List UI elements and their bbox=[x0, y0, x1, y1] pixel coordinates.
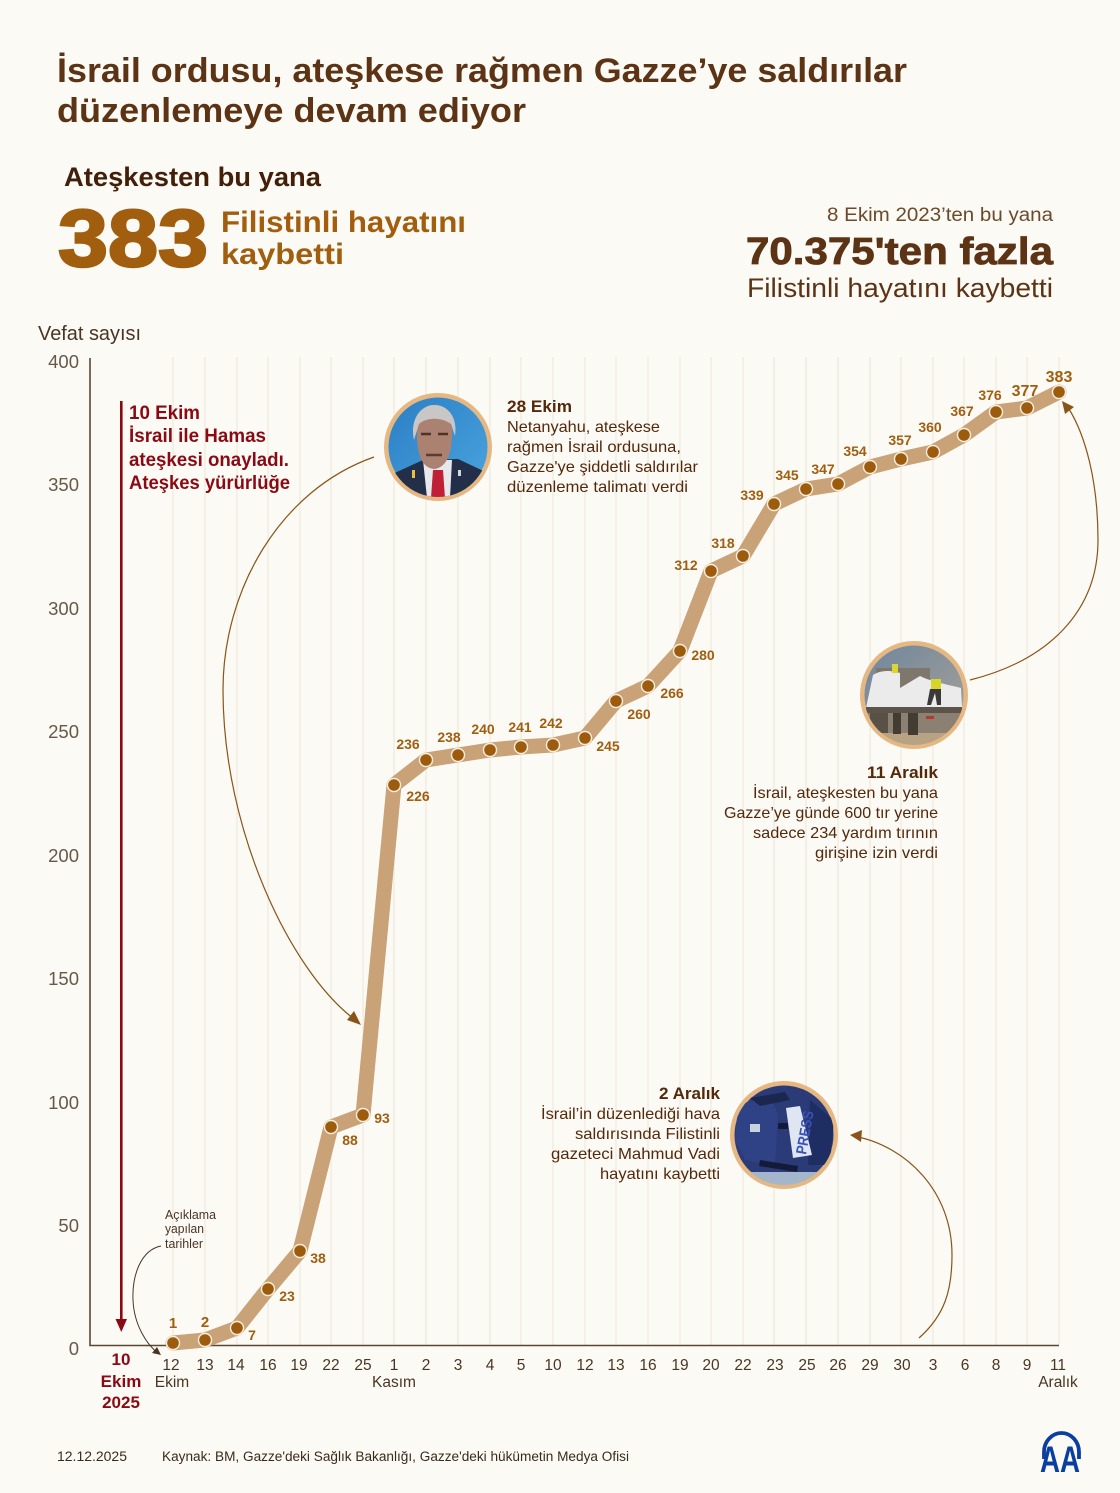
x axis date labels: 16 bbox=[639, 1357, 657, 1374]
data value labels: 242 bbox=[539, 715, 563, 731]
callout: 2 Aralık: saldırısında Filistinli bbox=[575, 1126, 720, 1143]
photo: Netanyahu bbox=[384, 393, 492, 501]
data value labels: 312 bbox=[674, 557, 698, 573]
data value labels: 7 bbox=[248, 1327, 256, 1343]
x axis ceasefire date bbox=[101, 1350, 141, 1412]
y axis labels: 100 bbox=[48, 1092, 79, 1113]
y axis labels: 150 bbox=[48, 968, 79, 989]
x axis date labels: Aralık bbox=[1038, 1374, 1078, 1391]
stat: deaths since October 2023 bbox=[746, 205, 1054, 303]
data value labels: 245 bbox=[596, 738, 620, 754]
data value labels: 354 bbox=[843, 443, 867, 459]
callout: 28 Ekim: 28 Ekim bbox=[507, 397, 572, 416]
data value labels: 93 bbox=[374, 1110, 390, 1126]
y axis title: Vefat sayısı bbox=[38, 323, 141, 345]
y axis labels: 400 bbox=[48, 351, 79, 372]
x axis date labels: 26 bbox=[829, 1357, 847, 1374]
footer: date: 12.12.2025 bbox=[57, 1449, 127, 1464]
data value labels: 376 bbox=[978, 387, 1002, 403]
stat caption bbox=[221, 206, 466, 271]
callout: 28 Ekim bbox=[507, 397, 699, 496]
callout: 11 Aralık bbox=[724, 763, 939, 862]
y axis labels: 350 bbox=[48, 474, 79, 495]
x axis date labels: 1 bbox=[390, 1357, 398, 1374]
callout: 10 Ekim ceasefire: İsrail ile Hamas bbox=[129, 426, 266, 447]
stat heading: Ateşkesten bu yana bbox=[64, 162, 322, 192]
data value labels: 383 bbox=[1046, 369, 1072, 386]
callout: 2 Aralık: hayatını kaybetti bbox=[600, 1166, 720, 1183]
x axis date labels: 6 bbox=[961, 1357, 969, 1374]
x axis date labels: 30 bbox=[893, 1357, 911, 1374]
data value labels: 357 bbox=[888, 432, 912, 448]
data value labels: 241 bbox=[508, 719, 532, 735]
x axis date labels: 5 bbox=[517, 1357, 525, 1374]
callout: 2 Aralık bbox=[541, 1084, 721, 1183]
icon: agency logo: AA bbox=[1040, 1439, 1080, 1480]
callout: 28 Ekim: rağmen İsrail ordusuna, bbox=[507, 437, 681, 456]
callout: 28 Ekim: düzenleme talimatı verdi bbox=[507, 479, 688, 496]
data point markers bbox=[166, 386, 1066, 1350]
data value labels: 377 bbox=[1012, 383, 1038, 400]
x axis date labels: 9 bbox=[1023, 1357, 1031, 1374]
data value labels: 360 bbox=[918, 419, 942, 435]
x axis date labels: 25 bbox=[798, 1357, 816, 1374]
footer: source: Kaynak: BM, Gazze'deki Sağlık Bakanlığı, Gazze'deki hükümetin Medya Ofisi bbox=[162, 1449, 629, 1464]
data value labels: 345 bbox=[775, 467, 799, 483]
data value labels: 23 bbox=[279, 1288, 295, 1304]
arrow: 28 Ekim to chart bbox=[223, 457, 374, 1025]
data value labels: 38 bbox=[310, 1250, 326, 1266]
y axis labels: 0 bbox=[69, 1338, 79, 1359]
x axis date labels: 22 bbox=[322, 1357, 340, 1374]
x axis date labels: 19 bbox=[290, 1357, 308, 1374]
callout: 11 Aralık: İsrail, ateşkesten bu yana bbox=[753, 783, 938, 802]
data value labels: 318 bbox=[711, 535, 735, 551]
callout: 11 Aralık: 11 Aralık bbox=[867, 763, 939, 782]
callout: 2 Aralık: gazeteci Mahmud Vadi bbox=[551, 1146, 720, 1163]
x axis date labels: 12 bbox=[162, 1357, 180, 1374]
data value labels: 347 bbox=[811, 461, 835, 477]
line chart: cumulative deaths bbox=[166, 369, 1072, 1350]
x axis date labels: 13 bbox=[196, 1357, 214, 1374]
callout: 28 Ekim: Gazze'ye şiddetli saldırılar bbox=[507, 459, 699, 476]
data value labels: 2 bbox=[201, 1314, 209, 1331]
title: düzenlemeye devam ediyor bbox=[57, 92, 526, 130]
total figure: 70.375'ten fazla bbox=[746, 231, 1054, 273]
callout: 11 Aralık: girişine izin verdi bbox=[815, 845, 938, 862]
data value labels: 1 bbox=[169, 1315, 177, 1332]
stat caption: kaybetti bbox=[221, 238, 344, 271]
arrow: statement dates bbox=[133, 1246, 161, 1355]
callout: 11 Aralık: Gazze’ye günde 600 tır yerine bbox=[724, 805, 938, 822]
x axis date labels: Kasım bbox=[372, 1374, 416, 1391]
callout: 28 Ekim: Netanyahu, ateşkese bbox=[507, 419, 660, 436]
y axis labels: 300 bbox=[48, 598, 79, 619]
note: statement dates: yapılan bbox=[165, 1222, 204, 1236]
y axis labels: 200 bbox=[48, 845, 79, 866]
data value labels: 266 bbox=[660, 685, 684, 701]
x axis date labels: 3 bbox=[454, 1357, 462, 1374]
x axis date labels bbox=[155, 1357, 1078, 1391]
x axis date labels: 14 bbox=[227, 1357, 245, 1374]
data value labels: 88 bbox=[342, 1132, 358, 1148]
data value labels: 240 bbox=[471, 721, 495, 737]
title: İsrail ordusu, ateşkese rağmen Gazze’ye saldırılar bbox=[57, 52, 907, 90]
x axis date labels: Ekim bbox=[155, 1374, 189, 1391]
x axis date labels: 12 bbox=[576, 1357, 594, 1374]
x axis date labels: 13 bbox=[607, 1357, 625, 1374]
stat: deaths since ceasefire bbox=[58, 162, 466, 284]
x axis date labels: 11 bbox=[1050, 1357, 1066, 1374]
line band bbox=[173, 392, 1059, 1343]
data value labels: 280 bbox=[691, 647, 715, 663]
x axis date labels: 29 bbox=[861, 1357, 879, 1374]
callout: 10 Ekim ceasefire bbox=[129, 403, 290, 494]
note: statement dates: Açıklama bbox=[165, 1208, 216, 1222]
x axis date labels: 3 bbox=[929, 1357, 937, 1374]
stat number 383: 383 bbox=[58, 194, 208, 284]
callout: 2 Aralık: 2 Aralık bbox=[659, 1084, 721, 1103]
total caption: Filistinli hayatını kaybetti bbox=[747, 273, 1053, 303]
note: statement dates: tarihler bbox=[165, 1237, 203, 1251]
x axis date labels: 8 bbox=[992, 1357, 1000, 1374]
callout: 11 Aralık: sadece 234 yardım tırının bbox=[753, 825, 938, 842]
callout: 2 Aralık: İsrail’in düzenlediği hava bbox=[541, 1104, 720, 1123]
data value labels: 367 bbox=[950, 403, 974, 419]
y axis labels: 250 bbox=[48, 721, 79, 742]
callout: 10 Ekim ceasefire: Ateşkes yürürlüğe bbox=[129, 473, 290, 494]
stat caption: Filistinli hayatını bbox=[221, 206, 466, 239]
x axis ceasefire date: 10 bbox=[112, 1350, 130, 1369]
x axis date labels: 19 bbox=[671, 1357, 689, 1374]
x axis ceasefire date: 2025 bbox=[102, 1393, 140, 1412]
data value labels: 238 bbox=[437, 729, 461, 745]
title bbox=[57, 52, 907, 130]
data value labels: 236 bbox=[396, 736, 420, 752]
note: statement dates bbox=[165, 1208, 216, 1251]
x axis date labels: 16 bbox=[259, 1357, 277, 1374]
arrow: 11 Aralık to end of line bbox=[970, 401, 1098, 680]
icon: agency logo bbox=[1040, 1433, 1080, 1480]
x axis date labels: 25 bbox=[354, 1357, 372, 1374]
arrow: 2 Aralık to photo bbox=[850, 1130, 952, 1338]
x axis date labels: 20 bbox=[702, 1357, 720, 1374]
data value labels: 339 bbox=[740, 487, 764, 503]
callout: 10 Ekim ceasefire: 10 Ekim bbox=[129, 403, 200, 424]
x axis date labels: 4 bbox=[486, 1357, 495, 1374]
x axis date labels: 22 bbox=[734, 1357, 752, 1374]
y axis labels bbox=[48, 351, 79, 1359]
photo: press vest bbox=[730, 1081, 838, 1189]
axes bbox=[90, 358, 1059, 1346]
data value labels: 260 bbox=[627, 706, 651, 722]
x axis date labels: 10 bbox=[544, 1357, 562, 1374]
y axis labels: 50 bbox=[58, 1215, 79, 1236]
photo: aid truck bbox=[860, 641, 968, 749]
callout: 10 Ekim ceasefire: ateşkesi onayladı. bbox=[129, 450, 289, 471]
x axis date labels: 2 bbox=[422, 1357, 430, 1374]
x axis date labels: 23 bbox=[766, 1357, 784, 1374]
date line: 8 Ekim 2023’ten bu yana bbox=[827, 205, 1053, 226]
arrow: ceasefire marker bbox=[116, 401, 127, 1332]
x axis ceasefire date: Ekim bbox=[101, 1372, 141, 1391]
data value labels: 226 bbox=[406, 788, 430, 804]
data value labels bbox=[169, 369, 1072, 1343]
press label: PRESS bbox=[793, 1109, 818, 1156]
